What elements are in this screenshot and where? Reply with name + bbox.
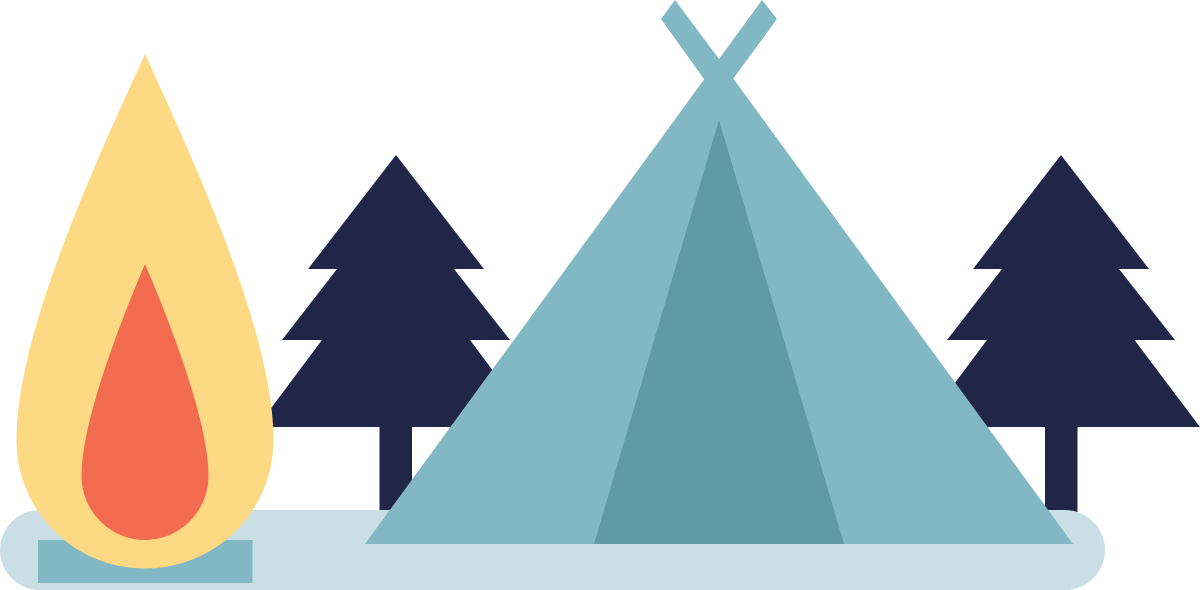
tent door xyxy=(594,120,844,544)
ground bar xyxy=(0,510,1105,590)
outer flame xyxy=(16,54,274,568)
tent body xyxy=(365,59,1073,544)
inner flame xyxy=(82,264,208,540)
icon: right pine tree xyxy=(922,155,1200,512)
tent poles xyxy=(661,0,777,79)
log base xyxy=(38,540,252,583)
icon: campfire xyxy=(16,54,274,583)
icon: left pine tree xyxy=(257,155,535,512)
icon: tent xyxy=(365,0,1073,544)
